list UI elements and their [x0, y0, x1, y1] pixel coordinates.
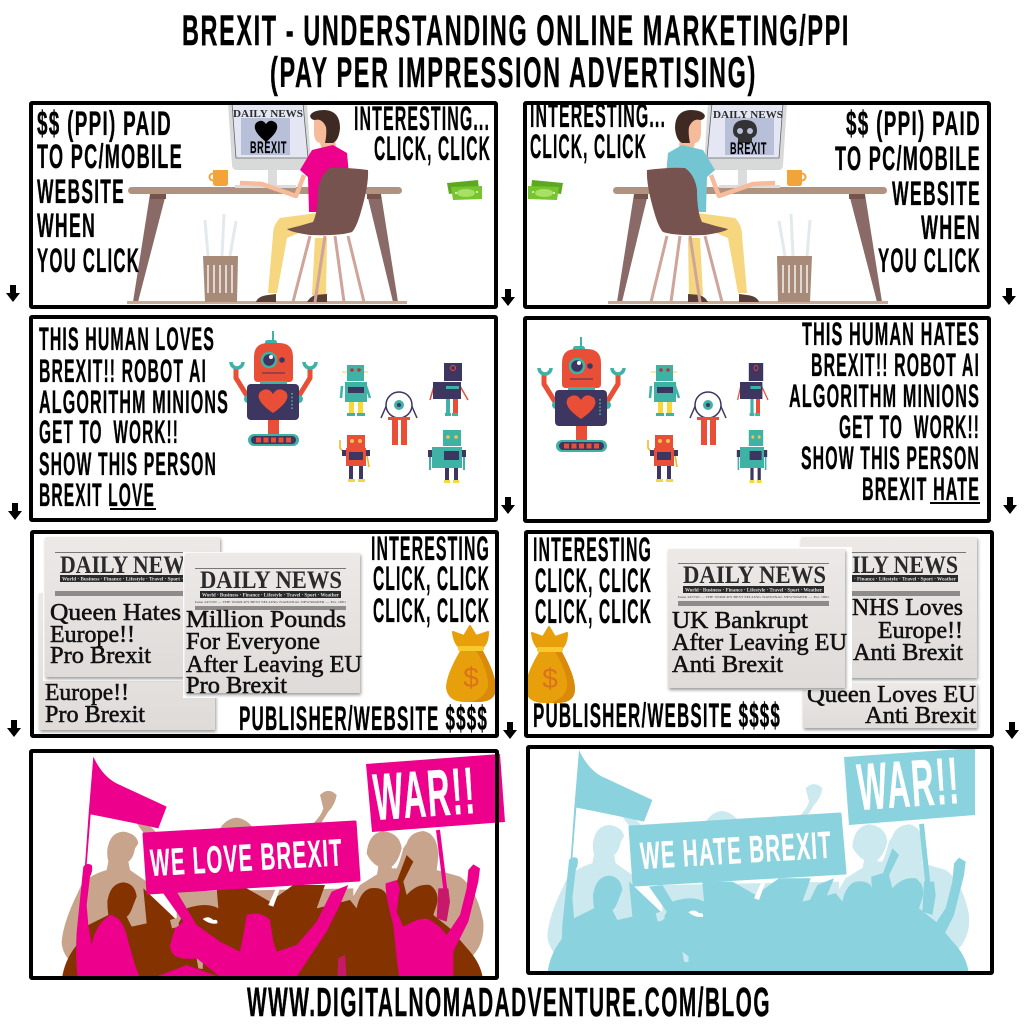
monitor screen content: hate Brexit — [713, 110, 783, 158]
sign: we hate Brexit — [630, 814, 845, 885]
panel: robots, hate — [525, 316, 989, 521]
caption: interesting click — [530, 97, 666, 166]
newspaper: million pounds: Million Pounds — [186, 607, 346, 633]
headlines on NHS newspaper: Europe!! — [878, 618, 963, 644]
newspaper: NHS loves Europe — [801, 537, 977, 678]
person in blue shirt — [666, 110, 775, 302]
coffee mug — [210, 170, 228, 186]
newspaper: million pounds: DAILY NEWS — [200, 567, 342, 594]
sign: we love Brexit — [144, 822, 359, 893]
newspaper: Queen loves EU: Queen Loves EU — [807, 682, 976, 708]
person in pink shirt — [240, 110, 349, 302]
monitor screen content: love Brexit: DAILY NEWS — [233, 109, 303, 120]
crowd silhouettes — [62, 791, 483, 982]
panel: pink crowd, we love Brexit — [31, 751, 505, 982]
paragraph: PPI paid: TO PC/MOBILE — [37, 138, 183, 176]
sign: we hate Brexit: WE HATE BREXIT — [639, 825, 833, 878]
minion robots — [648, 363, 768, 483]
paragraph: this human loves Brexit — [39, 321, 229, 513]
paragraph: PPI paid — [835, 105, 981, 280]
newspaper: UK bankrupt: UK Bankrupt — [672, 608, 808, 634]
text: INTERESTING — [371, 530, 490, 568]
headlines on NHS newspaper — [852, 552, 963, 666]
paragraph: this human loves Brexit: SHOW THIS PERSON — [39, 446, 217, 482]
big robot with heart — [231, 331, 316, 446]
paragraph: this human loves Brexit: ALGORITHM MINIONS — [39, 384, 229, 420]
icon: cash — [447, 180, 482, 200]
newspaper: million pounds — [183, 552, 363, 699]
minion robots — [340, 363, 468, 483]
monitor screen content: hate Brexit: DAILY NEWS — [713, 110, 783, 121]
newspaper: million pounds: Pro Brexit — [186, 673, 287, 699]
icon: money bag — [446, 626, 496, 702]
panel: blue crowd, we hate Brexit — [528, 743, 992, 975]
newspaper: NHS loves Europe: · Finance · Lifestyle · Travel · Sport · Weather — [854, 578, 957, 582]
newspaper: UK bankrupt: World · Business · Finance · Lifestyle · Travel · Sport · Weather — [685, 588, 823, 594]
panel: anti Brexit newspapers: CLICK, CLICK — [535, 562, 652, 600]
waste bin — [203, 214, 238, 302]
paragraph: this human loves Brexit: THIS HUMAN LOVES — [39, 321, 215, 357]
monitor screen content: hate Brexit: BREXIT — [730, 139, 767, 158]
desk illustration — [127, 187, 407, 304]
newspaper: Queen hates Europe: Europe!! — [50, 622, 135, 648]
panel: anti Brexit newspapers: INTERESTING — [533, 531, 652, 569]
crowd silhouettes — [547, 784, 969, 975]
newspaper: UK bankrupt: After Leaving EU — [672, 630, 847, 656]
paragraph: this human hates Brexit — [789, 316, 980, 507]
paragraph: PPI paid: $$ (PPI) PAID — [37, 105, 172, 143]
waste bin — [777, 214, 812, 302]
paragraph: PPI paid: WEBSITE — [37, 173, 125, 211]
newspaper: UK bankrupt: DAILY NEWS — [683, 562, 826, 589]
text: CLICK, CLICK — [373, 560, 490, 598]
office chair — [647, 168, 728, 302]
caption: interesting click: CLICK, CLICK — [530, 128, 647, 166]
flag — [571, 750, 652, 858]
panel: anti Brexit newspapers — [525, 531, 992, 736]
icon: cash — [528, 180, 563, 200]
monitor screen content: love Brexit: BREXIT — [250, 138, 287, 157]
caption: interesting click click — [533, 531, 652, 631]
panel: hate, clicking on a website: INTERESTING... — [530, 97, 666, 135]
sign: war — [366, 753, 505, 890]
sign: war — [844, 743, 975, 894]
sign: we love Brexit: WE LOVE BREXIT — [149, 832, 344, 885]
newspaper: UK bankrupt: Anti Brexit — [672, 652, 783, 678]
newspaper: million pounds: For Everyone — [186, 629, 320, 655]
headlines on NHS newspaper: ILY NEWS — [852, 552, 958, 579]
icon: money bag: $ — [463, 662, 479, 693]
monitor screen content: love Brexit — [233, 109, 303, 157]
icon: money bag: $ — [542, 663, 558, 694]
newspaper: lower fold: Europe!! — [45, 680, 129, 706]
newspaper: lower fold: Pro Brexit — [45, 702, 145, 728]
panel: love, clicking on a website — [31, 100, 496, 307]
text: CLICK, CLICK — [373, 592, 490, 630]
paragraph: PPI paid: YOU CLICK — [37, 242, 140, 280]
caption: interesting click click — [371, 530, 490, 630]
paragraph: PPI paid — [37, 105, 183, 280]
title — [182, 7, 850, 97]
newspaper: Queen hates Europe: Pro Brexit — [50, 643, 151, 669]
big robot with heart — [539, 337, 624, 452]
paragraph: this human loves Brexit: GET TO WORK!! — [39, 414, 179, 450]
newspaper: million pounds: After Leaving EU — [186, 652, 362, 678]
newspaper: UK bankrupt — [668, 547, 852, 690]
paragraph: this human loves Brexit: BREXIT!! ROBOT AI — [39, 353, 207, 389]
text: INTERESTING... — [354, 100, 490, 138]
sign: war: WAR!! — [371, 753, 479, 834]
desk illustration — [608, 187, 888, 304]
newspaper: UK bankrupt: Issue 245720 — THE WORLD'S BEST SELLING NATIONAL NEWSPAPER — Est. 1801 — [678, 595, 830, 599]
newspaper: Queen loves EU: Anti Brexit — [865, 703, 976, 729]
paragraph: PPI paid: WHEN — [37, 207, 96, 245]
headlines on NHS newspaper: Anti Brexit — [853, 640, 963, 666]
newspaper: Queen hates Europe: DAILY NEW — [60, 552, 185, 579]
computer monitor — [704, 103, 787, 188]
arrows between rows — [6, 285, 1019, 739]
paragraph: this human loves Brexit: BREXIT LOVE — [39, 477, 155, 513]
panel: anti Brexit newspapers: CLICK, CLICK — [535, 593, 652, 631]
caption: publisher website money: PUBLISHER/WEBSITE $$$$ — [533, 697, 781, 735]
newspaper: Queen loves EU — [803, 682, 977, 729]
newspaper: Queen hates Europe: Queen Hates — [50, 600, 181, 626]
newspaper: million pounds: Issue 245720 — THE WORLD'S BEST SELLING NATIONAL NEWSPAPER — Est. 1801 — [195, 600, 347, 604]
flag — [85, 757, 167, 865]
newspaper: Queen hates Europe: World · Business · Finance · Lifestyle · Travel · Sport · — [62, 578, 183, 582]
newspaper: million pounds: World · Business · Finance · Lifestyle · Travel · Sport · Weather — [202, 594, 340, 598]
newspaper: lower fold — [39, 593, 215, 730]
office chair — [287, 168, 368, 302]
coffee mug — [787, 170, 806, 186]
icon: money bag — [525, 627, 575, 703]
text: CLICK, CLICK — [374, 130, 491, 168]
caption: interesting click — [354, 100, 491, 168]
headlines on NHS newspaper: NHS Loves — [852, 595, 963, 621]
computer monitor — [228, 103, 311, 188]
panel: pro Brexit newspapers: PUBLISHER/WEBSITE $$$$ — [239, 700, 488, 738]
newspaper: Queen hates Europe — [43, 535, 225, 681]
panel: pro Brexit newspapers — [32, 530, 497, 738]
panel: robots, love — [31, 317, 496, 520]
panel: hate, clicking on a website — [525, 97, 989, 307]
